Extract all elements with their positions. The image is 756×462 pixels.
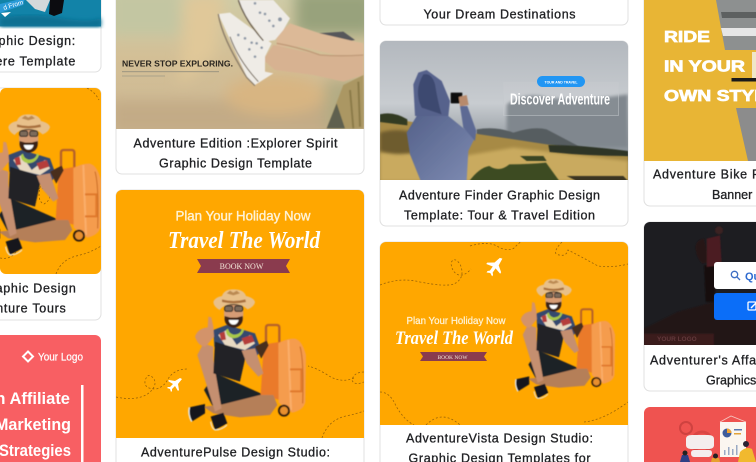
headline text: IN YOUR	[664, 58, 745, 76]
caption	[0, 34, 76, 68]
caption: AdventureVista Design Studio:	[406, 432, 593, 446]
caption	[650, 354, 756, 388]
image: hiker photographing mountains	[380, 41, 628, 181]
heading text: Travel The World	[168, 228, 321, 254]
ribbon: book now	[420, 352, 487, 361]
logo	[23, 352, 83, 364]
poster text: NEVER STOP EXPLORING.	[122, 58, 233, 68]
caption: Graphics	[706, 374, 756, 388]
heading text	[396, 316, 514, 344]
caption	[653, 168, 756, 202]
panel: ocean template card	[0, 0, 101, 72]
overlay: discover adventure: Discover Adventure	[510, 92, 610, 108]
icon: plane	[486, 258, 502, 276]
panel: affiliate marketing red card	[0, 335, 101, 462]
image: sneakers photo	[116, 0, 364, 129]
heading: affiliate marketing strategies: Strategies	[0, 442, 71, 460]
illustration: crossed legs and sneakers	[218, 0, 363, 128]
caption: Adventure Finder Graphic Design	[399, 188, 600, 202]
image: orange travel poster	[380, 240, 628, 425]
panel: Adventure Bike card	[644, 0, 756, 206]
panel: AdventurePulse card	[116, 190, 364, 462]
caption: Adventure Edition :Explorer Spirit	[134, 136, 338, 150]
heading text: Plan Your Holiday Now	[406, 315, 506, 327]
heading text	[170, 210, 320, 248]
panel: AdventureVista card	[380, 240, 628, 462]
heading text: Travel The World	[395, 328, 513, 349]
panel: red business illustration card	[644, 407, 756, 462]
button: edit	[714, 293, 756, 320]
logo: YOUR LOGO	[657, 336, 697, 343]
image: orange travel poster	[0, 88, 101, 274]
panel: Adventure Edition card	[110, 0, 380, 174]
illustration: traveller with suitcase	[516, 279, 615, 398]
ribbon: book now: BOOK NOW	[220, 262, 264, 271]
image: orange travel poster	[116, 190, 364, 438]
ribbon: book now	[197, 259, 290, 273]
illustration: traveller with suitcase	[0, 114, 101, 255]
panel: Adventure Finder card	[380, 41, 628, 226]
caption: Graphic Design Template	[159, 156, 312, 170]
icon: plane	[167, 378, 182, 392]
image: dark mountaineer photo	[644, 222, 756, 345]
panel: Adventurer's Affair card	[644, 222, 756, 391]
caption	[0, 282, 76, 316]
caption: Template: Tour & Travel Edition	[404, 208, 595, 222]
headline text	[664, 29, 756, 105]
caption: AdventurePulse Design Studio:	[141, 446, 330, 460]
caption	[399, 188, 600, 222]
heading text: Plan Your Holiday Now	[176, 208, 311, 224]
poster text	[122, 60, 232, 76]
overlay: discover adventure: TOUR AND TRAVEL	[544, 80, 578, 84]
illustration: team with charts	[680, 416, 756, 462]
headline text: RIDE	[664, 29, 710, 46]
overlay: discover adventure	[504, 76, 618, 116]
caption	[406, 432, 593, 462]
hiker figure	[407, 70, 476, 181]
heading: affiliate marketing strategies	[0, 385, 84, 462]
panel: Dream Destinations card	[380, 0, 628, 25]
caption: Your Dream Destinations	[424, 8, 576, 22]
headline text: OWN STYLE	[664, 88, 756, 105]
caption	[134, 136, 338, 170]
panel: orange holiday template card, column one	[0, 88, 101, 320]
caption: Banner	[712, 188, 753, 202]
illustration: traveller with suitcase	[189, 289, 306, 430]
logo: Your Logo	[38, 352, 83, 364]
ribbon: book now: BOOK NOW	[437, 355, 468, 361]
image: yellow bike banner	[644, 0, 756, 161]
